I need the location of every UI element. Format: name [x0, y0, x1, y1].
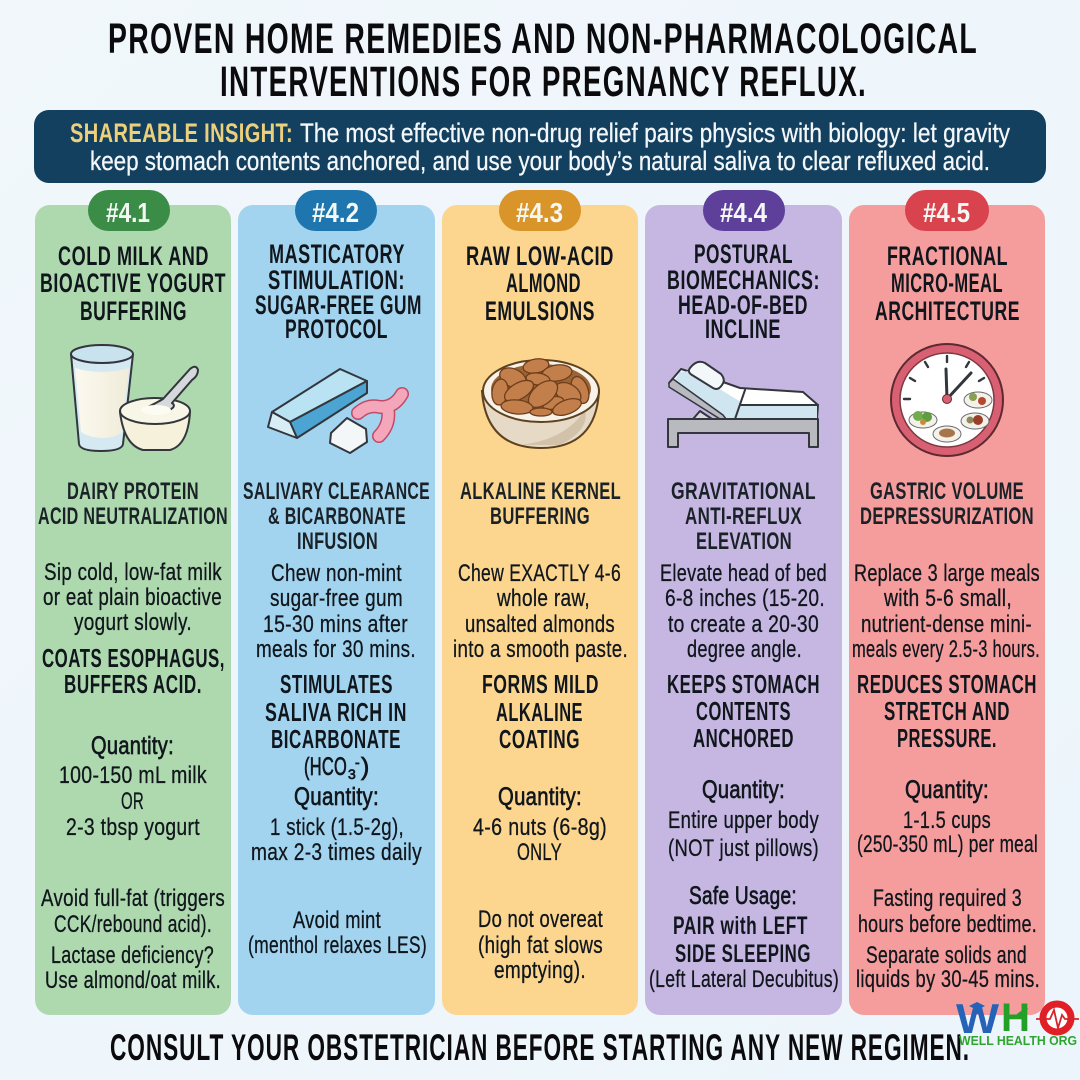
- safe usage 4.4: [649, 882, 839, 993]
- badge 4.4: [703, 190, 785, 231]
- quantity 4.1: [59, 732, 207, 841]
- benefit 4.2: (HCO: [304, 753, 347, 781]
- instructions 4.4: [660, 560, 827, 663]
- instructions 4.1: Sip cold, low-fat milk: [44, 559, 222, 586]
- panel: 4.5 micro-meals: [849, 190, 1045, 1015]
- panel: 4.3 raw almonds: [442, 190, 638, 1015]
- quantity 4.1: 100-150 mL milk: [59, 762, 207, 789]
- benefit 4.4: CONTENTS: [696, 696, 791, 726]
- instructions 4.4: 6-8 inches (15-20.: [665, 585, 825, 612]
- badge 4.5: #4.5: [923, 197, 970, 228]
- benefit 4.4: [667, 669, 820, 753]
- benefit 4.2: STIMULATES: [280, 669, 393, 699]
- heading 4.1: [40, 241, 226, 326]
- badge 4.3: #4.3: [516, 197, 563, 228]
- quantity 4.2: max 2-3 times daily: [251, 839, 422, 866]
- subheading 4.4: ELEVATION: [696, 528, 792, 555]
- heading 4.2: MASTICATORY: [269, 239, 405, 269]
- instructions 4.3: Chew EXACTLY 4-6: [458, 560, 621, 587]
- safe usage 4.4: (Left Lateral Decubitus): [649, 966, 839, 993]
- heading 4.4: [667, 239, 820, 344]
- cautions 4.3: [478, 906, 603, 984]
- benefit 4.2: [265, 669, 407, 782]
- instructions 4.3: [453, 560, 628, 663]
- subheading 4.2: SALIVARY CLEARANCE: [243, 478, 430, 505]
- quantity 4.3: [473, 783, 607, 866]
- subheading 4.2: & BICARBONATE: [268, 503, 406, 530]
- heading 4.4: HEAD-OF-BED: [678, 290, 808, 320]
- heading 4.3: RAW LOW-ACID: [466, 241, 614, 271]
- quantity 4.1: Quantity:: [91, 732, 174, 760]
- quantity 4.5: 1-1.5 cups: [903, 807, 991, 834]
- heading 4.2: SUGAR-FREE GUM: [255, 290, 422, 320]
- safe usage 4.4: SIDE SLEEPING: [675, 940, 811, 968]
- instructions 4.2: [256, 560, 416, 663]
- badge 4.2: [295, 190, 377, 231]
- subheading 4.3: ALKALINE KERNEL: [460, 478, 621, 505]
- instructions 4.3: into a smooth paste.: [453, 636, 628, 663]
- logo: WHO Well Health Org: W: [956, 995, 999, 1042]
- quantity 4.4: (NOT just pillows): [668, 835, 819, 862]
- instructions 4.1: [43, 559, 222, 636]
- cautions 4.3: Do not overeat: [478, 906, 603, 933]
- quantity 4.2: 1 stick (1.5-2g),: [270, 814, 404, 841]
- insight banner: SHAREABLE INSIGHT:: [70, 118, 293, 148]
- cautions 4.2: [248, 907, 427, 959]
- quantity 4.1: 2-3 tbsp yogurt: [66, 814, 200, 841]
- heading 4.1: COLD MILK AND: [58, 241, 209, 271]
- heading 4.3: [466, 241, 614, 326]
- panel: 4.4 head-of-bed incline: [645, 190, 842, 1015]
- benefit 4.3: ALKALINE: [496, 697, 583, 727]
- benefit 4.4: KEEPS STOMACH: [667, 669, 820, 699]
- benefit 4.3: COATING: [499, 724, 580, 754]
- benefit 4.2: ): [361, 753, 370, 781]
- cautions 4.2: Avoid mint: [293, 907, 381, 934]
- heading 4.1: BUFFERING: [80, 296, 187, 326]
- heading 4.2: STIMULATION:: [268, 265, 405, 295]
- instructions 4.3: whole raw,: [496, 585, 590, 612]
- icon: bowl of almonds: [482, 357, 599, 448]
- quantity 4.3: 4-6 nuts (6-8g): [473, 814, 607, 841]
- benefit 4.5: STRETCH AND: [884, 696, 1010, 726]
- icon: milk glass and yogurt: [71, 345, 198, 451]
- instructions 4.1: yogurt slowly.: [74, 609, 192, 636]
- insight banner: [34, 110, 1046, 183]
- heading 4.4: BIOMECHANICS:: [667, 265, 820, 295]
- instructions 4.1: or eat plain bioactive: [43, 584, 222, 611]
- panel: 4.1 cold milk and yogurt: [35, 190, 231, 1015]
- cautions 4.1: [41, 885, 225, 994]
- heading 4.3: ALMOND: [506, 268, 581, 298]
- cautions 4.1: Lactase deficiency?: [51, 942, 214, 969]
- benefit 4.1: [42, 643, 225, 699]
- badge 4.2: #4.2: [312, 197, 359, 228]
- logo: WHO Well Health Org: H: [1001, 996, 1030, 1040]
- subheading 4.1: DAIRY PROTEIN: [67, 478, 199, 505]
- panel: 4.2 sugar-free gum: [238, 190, 435, 1015]
- badge 4.1: #4.1: [106, 197, 150, 228]
- title: [108, 15, 978, 106]
- instructions 4.4: degree angle.: [687, 636, 802, 663]
- benefit 4.4: ANCHORED: [693, 723, 794, 753]
- cautions 4.2: (menthol relaxes LES): [248, 932, 427, 959]
- badge 4.1: [88, 190, 170, 231]
- heading 4.4: POSTURAL: [694, 239, 793, 269]
- heading 4.5: FRACTIONAL: [887, 241, 1008, 271]
- subheading 4.1: [38, 478, 228, 530]
- cautions 4.5: Fasting required 3: [873, 885, 1022, 912]
- heading 4.1: BIOACTIVE YOGURT: [40, 268, 226, 298]
- badge 4.4: #4.4: [720, 197, 767, 228]
- icon: inclined bed: [668, 362, 818, 447]
- benefit 4.2: BICARBONATE: [271, 724, 401, 754]
- benefit 4.5: [857, 669, 1037, 753]
- logo: WHO Well Health Org: [956, 995, 1079, 1048]
- safe usage 4.4: Safe Usage:: [689, 882, 797, 910]
- benefit 4.2: 3: [348, 766, 356, 782]
- benefit 4.3: [482, 669, 599, 754]
- badge 4.5: [905, 190, 989, 231]
- subheading 4.2: INFUSION: [297, 528, 378, 555]
- quantity 4.3: ONLY: [517, 839, 562, 866]
- subheading 4.2: [243, 478, 430, 555]
- heading 4.4: INCLINE: [705, 314, 781, 344]
- subheading 4.3: BUFFERING: [490, 503, 590, 530]
- heading 4.2: [255, 239, 422, 344]
- instructions 4.5: nutrient-dense mini-: [861, 611, 1032, 638]
- subheading 4.3: [460, 478, 621, 530]
- cautions 4.5: Separate solids and: [866, 942, 1027, 969]
- heading 4.3: EMULSIONS: [485, 296, 595, 326]
- benefit 4.1: COATS ESOPHAGUS,: [42, 643, 225, 673]
- instructions 4.2: 15-30 mins after: [263, 611, 408, 638]
- instructions 4.5: with 5-6 small,: [883, 585, 1012, 612]
- quantity 4.4: [668, 776, 819, 862]
- cautions 4.1: Avoid full-fat (triggers: [41, 885, 225, 912]
- subheading 4.4: ANTI-REFLUX: [685, 503, 802, 530]
- quantity 4.5: [857, 776, 1038, 858]
- quantity 4.3: Quantity:: [498, 783, 582, 811]
- subheading 4.1: ACID NEUTRALIZATION: [38, 503, 228, 530]
- quantity 4.5: Quantity:: [905, 776, 989, 804]
- heading 4.5: [875, 241, 1020, 326]
- cautions 4.5: [856, 885, 1040, 993]
- instructions 4.4: to create a 20-30: [668, 611, 819, 638]
- quantity 4.1: OR: [121, 788, 144, 815]
- heading 4.5: MICRO-MEAL: [891, 268, 1003, 298]
- benefit 4.2: -: [355, 754, 360, 770]
- badge 4.3: [499, 190, 581, 231]
- quantity 4.2: Quantity:: [294, 783, 379, 811]
- quantity 4.2: [251, 783, 422, 866]
- cautions 4.3: emptying).: [494, 957, 586, 984]
- subheading 4.4: GRAVITATIONAL: [671, 478, 816, 505]
- icon: clock with meals: [891, 344, 1003, 456]
- benefit 4.3: FORMS MILD: [482, 669, 599, 699]
- cautions 4.3: (high fat slows: [478, 932, 603, 959]
- instructions 4.5: [852, 560, 1040, 663]
- instructions 4.3: unsalted almonds: [465, 611, 615, 638]
- instructions 4.2: meals for 30 mins.: [256, 636, 416, 663]
- instructions 4.2: sugar-free gum: [270, 585, 403, 612]
- icon: gum stick and salivary gland: [268, 369, 402, 453]
- benefit 4.5: PRESSURE.: [897, 723, 997, 753]
- benefit 4.2: SALIVA RICH IN: [265, 697, 407, 727]
- cautions 4.1: CCK/rebound acid).: [54, 911, 212, 938]
- cautions 4.1: Use almond/oat milk.: [45, 967, 221, 994]
- heading 4.2: PROTOCOL: [285, 314, 388, 344]
- quantity 4.4: Quantity:: [702, 776, 785, 804]
- instructions 4.4: Elevate head of bed: [660, 560, 827, 587]
- safe usage 4.4: PAIR with LEFT: [673, 912, 808, 940]
- benefit 4.1: BUFFERS ACID.: [64, 669, 202, 699]
- instructions 4.2: Chew non-mint: [271, 560, 402, 587]
- subheading 4.4: [671, 478, 816, 555]
- subheading 4.5: [860, 478, 1034, 530]
- quantity 4.4: Entire upper body: [668, 807, 819, 834]
